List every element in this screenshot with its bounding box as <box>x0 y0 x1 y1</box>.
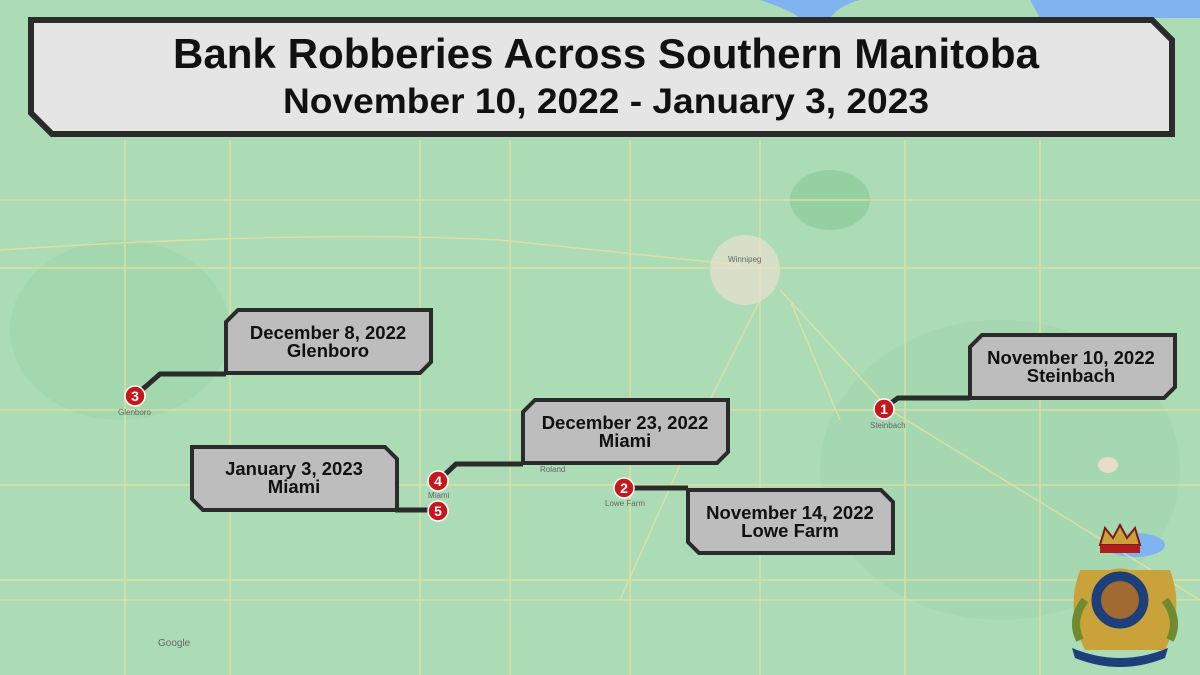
map background: Glenboro <box>118 408 151 417</box>
map background: Winnipeg <box>728 255 761 264</box>
marker 1: 1 <box>880 401 888 417</box>
markers <box>125 386 894 521</box>
marker 3 <box>125 386 145 406</box>
callout: Glenboro <box>226 310 431 373</box>
leader lines <box>136 374 970 510</box>
marker 5 <box>428 501 448 521</box>
callout: Jan 3 Miami: Miami <box>268 476 320 497</box>
callout: Steinbach <box>970 335 1175 398</box>
callout: Lowe Farm: November 14, 2022 <box>706 502 874 523</box>
callout: Glenboro: December 8, 2022 <box>250 322 406 343</box>
callout: Dec 23 Miami <box>523 400 728 463</box>
title: Bank Robberies Across Southern Manitoba <box>173 30 1040 77</box>
callout: Dec 23 Miami: Miami <box>599 430 651 451</box>
callout: Jan 3 Miami <box>192 447 397 510</box>
map background: Roland <box>540 465 565 474</box>
callout: Dec 23 Miami: December 23, 2022 <box>542 412 708 433</box>
map background: Miami <box>428 491 450 500</box>
callout: Lowe Farm <box>688 490 893 553</box>
map background: Lowe Farm <box>605 499 645 508</box>
callout: Steinbach: Steinbach <box>1027 365 1115 386</box>
marker 5: 5 <box>434 503 442 519</box>
callout: Steinbach: November 10, 2022 <box>987 347 1155 368</box>
callout: Glenboro: Glenboro <box>287 340 369 361</box>
subtitle: November 10, 2022 - January 3, 2023 <box>283 82 929 121</box>
marker 2 <box>614 478 634 498</box>
marker 1 <box>874 399 894 419</box>
marker 4 <box>428 471 448 491</box>
marker 2: 2 <box>620 480 628 496</box>
title box <box>31 20 1172 134</box>
marker 3: 3 <box>131 388 139 404</box>
icon: RCMP crest <box>1072 525 1176 667</box>
marker 4: 4 <box>434 473 442 489</box>
map background: Google <box>158 638 191 649</box>
callout: Jan 3 Miami: January 3, 2023 <box>225 458 363 479</box>
map background: Steinbach <box>870 421 906 430</box>
callout: Lowe Farm: Lowe Farm <box>741 520 839 541</box>
